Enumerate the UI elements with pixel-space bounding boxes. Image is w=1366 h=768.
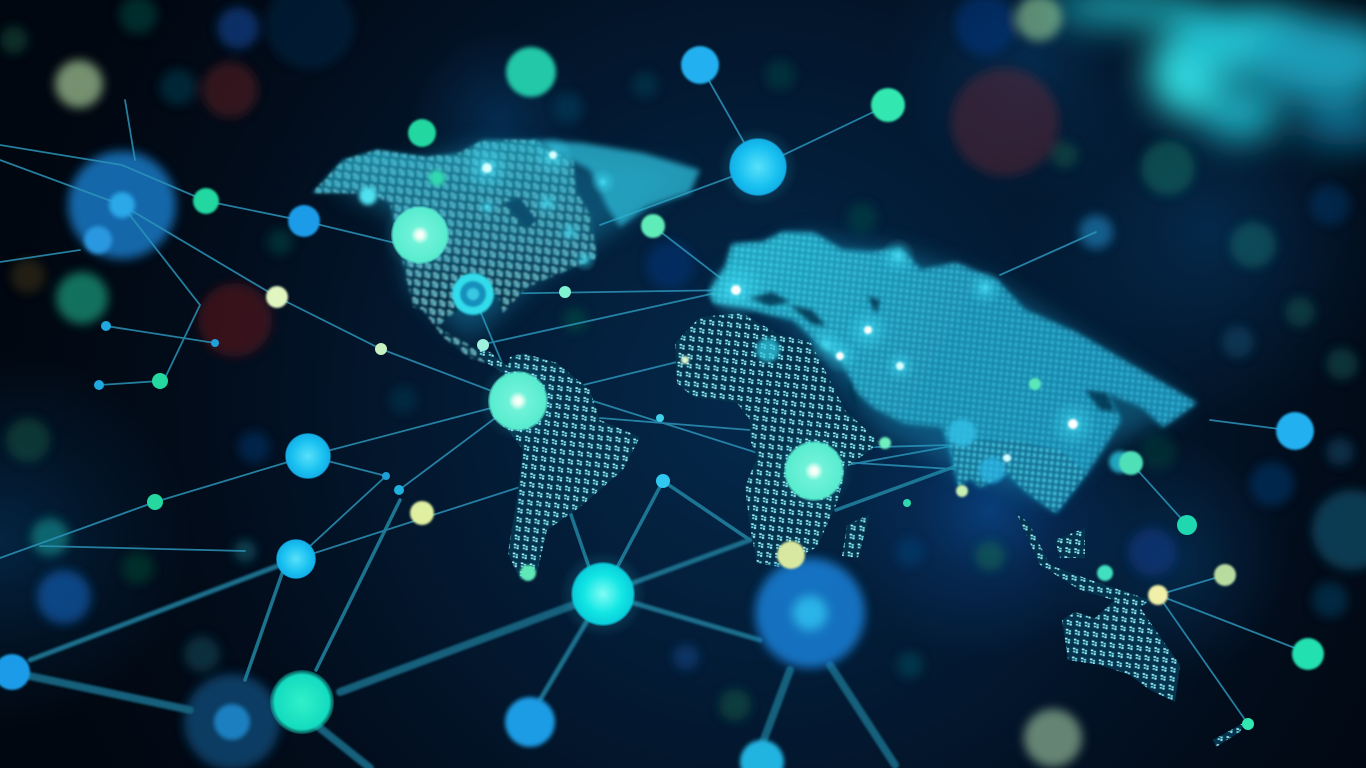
- node: South America: [478, 361, 558, 441]
- continent: Eurasia dotted south: [950, 440, 1087, 513]
- node: bottom blue: [505, 697, 555, 747]
- node: top-left lower core: [84, 226, 112, 254]
- island: Madagascar: [842, 514, 870, 558]
- node: left blue: [285, 433, 331, 479]
- large glowing network nodes: [0, 127, 865, 768]
- continent: Australia: [1062, 600, 1180, 702]
- map glow: city hotspots: [359, 135, 1131, 497]
- island: New Zealand: [1213, 722, 1245, 747]
- node: left edge blue: [0, 654, 30, 690]
- islands: Southeast Asia: [1015, 510, 1150, 608]
- node: North America: [382, 197, 458, 273]
- cloud: top-right cyan glow: [1050, 0, 1366, 145]
- continent: South America: [490, 353, 640, 580]
- node: bottom-left core: [214, 704, 250, 740]
- continent: Eurasia texture: [709, 232, 1197, 513]
- continent: Africa: [675, 313, 880, 567]
- node: blurred blue: [755, 558, 865, 668]
- continent: Greenland: [533, 140, 700, 227]
- node: North Atlantic: [718, 127, 798, 207]
- node: bottom teal: [270, 670, 334, 734]
- node: South Atlantic: [559, 550, 647, 638]
- world map: [312, 140, 1245, 747]
- node: bottom edge blue: [740, 740, 784, 768]
- continent: North America upper glow: [312, 140, 597, 313]
- continent: Eurasia: [709, 232, 1197, 513]
- continent: Central America: [473, 347, 510, 374]
- node: lower-left blue: [276, 539, 316, 579]
- continent: North America: [312, 140, 597, 363]
- map halo: [330, 145, 1190, 500]
- node: Africa: [774, 431, 854, 511]
- node: Mexico ring: [452, 273, 494, 315]
- node: top-left core: [109, 192, 135, 218]
- seas: Black Sea, Caspian and Red Sea: [748, 292, 1115, 412]
